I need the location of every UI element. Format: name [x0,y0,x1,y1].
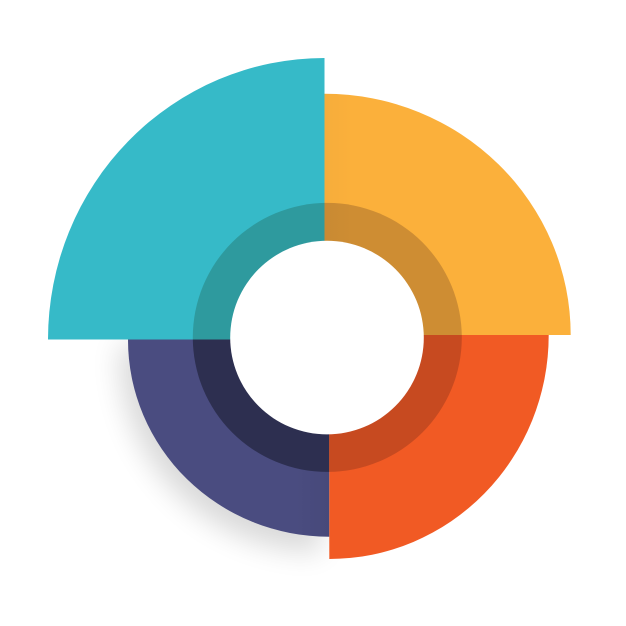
segment: orange quadrant [329,335,549,559]
orange inner ring band [329,335,462,472]
segment: teal quadrant [48,58,324,340]
ring chart infographic [48,58,571,560]
center white circle [230,241,424,434]
segment: purple quadrant [128,340,330,537]
teal inner ring band [192,202,324,340]
drop shadow under purple segment [120,345,321,552]
yellow inner ring band [324,202,462,335]
segment: yellow quadrant [324,94,571,335]
purple inner ring band [192,340,330,472]
